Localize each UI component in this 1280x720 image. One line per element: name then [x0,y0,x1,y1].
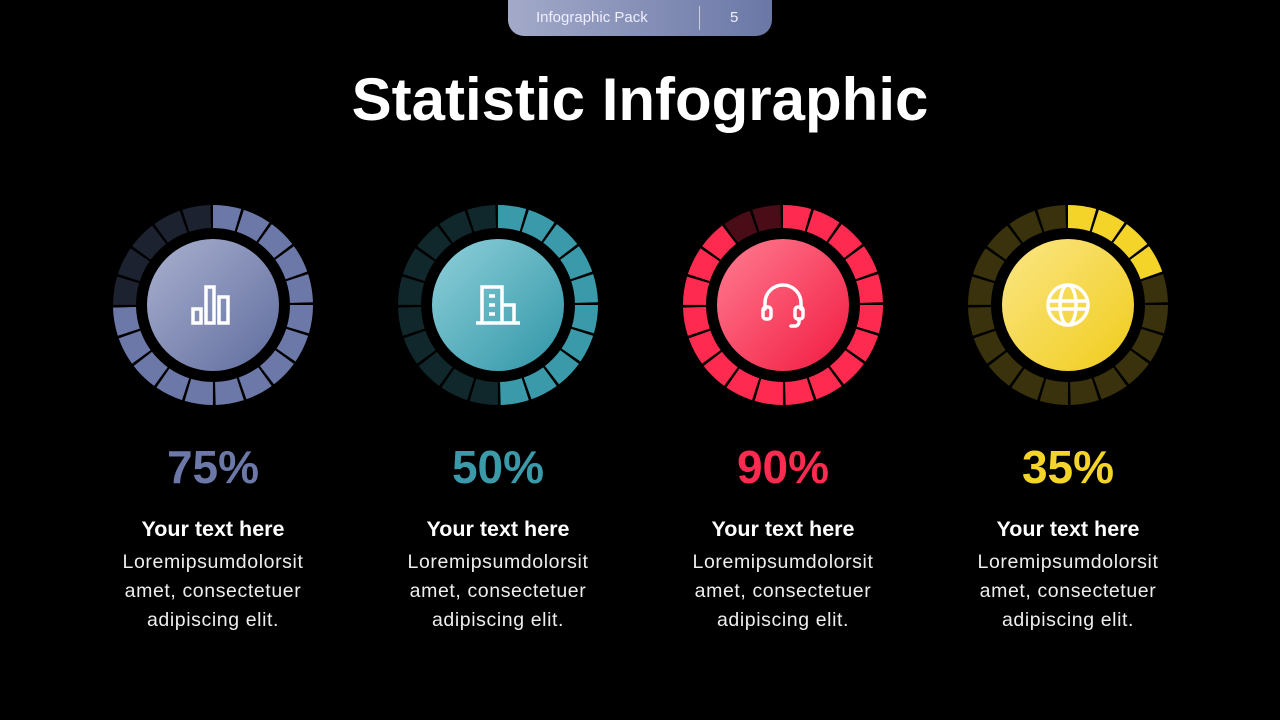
column: 75%: amet, consectetuer [125,580,301,602]
icon: globe [1048,285,1088,325]
header tab: 5 [730,9,738,26]
column: 50%: Loremipsumdolorsit [408,551,588,573]
donut: 75% [124,216,302,394]
column: 50% [408,441,588,631]
header tab: Infographic Pack [536,9,648,26]
column: 35%: Your text here [996,517,1139,541]
column: 35%: Loremipsumdolorsit [978,551,1158,573]
title: Statistic Infographic [352,66,928,133]
header tab [508,0,772,36]
donut: 35% [980,216,1156,394]
column: 90% [693,441,873,631]
column: 90%: adipiscing elit. [717,609,849,631]
donut: 90% [694,216,872,394]
icon: headset [763,285,803,326]
column: 75%: Your text here [142,517,284,541]
column: 90%: Your text here [712,517,854,541]
column: 90%: amet, consectetuer [695,580,871,602]
icon: building [476,287,520,323]
column: 50%: Your text here [426,517,569,541]
column: 75%: Loremipsumdolorsit [123,551,303,573]
donut: 50% [410,216,586,394]
column: 75%: 75% [167,441,259,493]
column: 90%: 90% [737,441,829,493]
column: 35%: 35% [1022,441,1114,493]
icon: bar chart [193,287,228,323]
column: 50%: amet, consectetuer [410,580,586,602]
column: 50%: 50% [452,441,544,493]
column: 90%: Loremipsumdolorsit [693,551,873,573]
column: 75% [123,441,303,631]
column: 35%: adipiscing elit. [1002,609,1134,631]
column: 50%: adipiscing elit. [432,609,564,631]
column: 35%: amet, consectetuer [980,580,1156,602]
column: 75%: adipiscing elit. [147,609,279,631]
column: 35% [978,441,1158,631]
